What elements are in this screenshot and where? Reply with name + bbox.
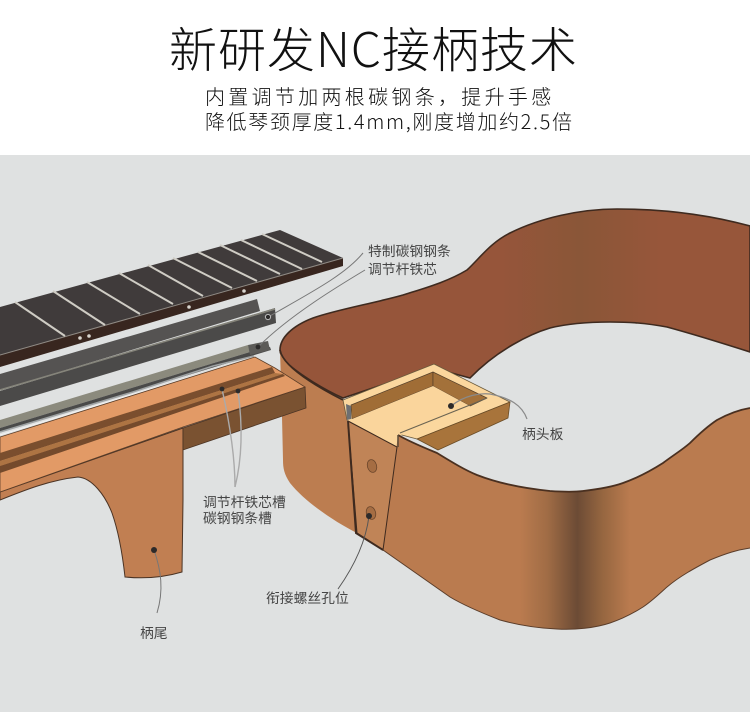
label: carbon steel bar: 特制碳钢钢条 <box>368 243 451 259</box>
right wall bottom edge <box>383 548 750 629</box>
guitar side: outer left wall <box>280 350 357 533</box>
title: 新研发NC接柄技术 <box>169 11 577 81</box>
icon: screw hole lower <box>365 506 377 520</box>
block side face <box>417 402 510 450</box>
subtitle text block: 降低琴颈厚度1.4mm,刚度增加约2.5倍 <box>205 106 572 135</box>
guitar side: inner wall <box>280 209 750 398</box>
neck grooves <box>0 367 275 461</box>
label: heel: 柄尾 <box>140 626 168 641</box>
subtitle text block: 内置调节加两根碳钢条，提升手感 <box>205 81 554 110</box>
label: truss rod core: 调节杆铁芯 <box>368 262 437 277</box>
panel: illustration background <box>0 155 750 712</box>
front rail line <box>400 398 487 433</box>
head block <box>343 364 510 450</box>
neck: top surface, grooves, end face and heel <box>0 357 306 578</box>
truss rod iron core <box>0 341 271 435</box>
guitar side: outer right wall <box>383 408 750 629</box>
carbon steel bar <box>0 299 276 406</box>
recess left wall <box>351 372 433 419</box>
icon: screw hole upper <box>366 459 378 473</box>
leader dots <box>151 314 454 553</box>
neck joint flap with screw holes <box>348 421 398 550</box>
rim line <box>280 350 343 400</box>
label: screw holes: 衔接螺丝孔位 <box>266 590 349 606</box>
label: head block: 柄头板 <box>522 427 564 442</box>
label: slots: 碳钢钢条槽 <box>203 510 272 526</box>
subtitle text block <box>205 81 572 135</box>
grey corner <box>346 404 351 420</box>
label: slots <box>203 495 286 526</box>
recess back wall <box>433 372 487 406</box>
neck end face <box>183 387 306 450</box>
neck heel <box>0 428 183 578</box>
recess floor <box>347 386 470 447</box>
leader lines <box>154 253 527 613</box>
fretboard <box>0 230 343 367</box>
right wall top rim <box>398 408 750 492</box>
label: slots: 调节杆铁芯槽 <box>203 495 286 510</box>
neck top surface <box>0 357 305 492</box>
